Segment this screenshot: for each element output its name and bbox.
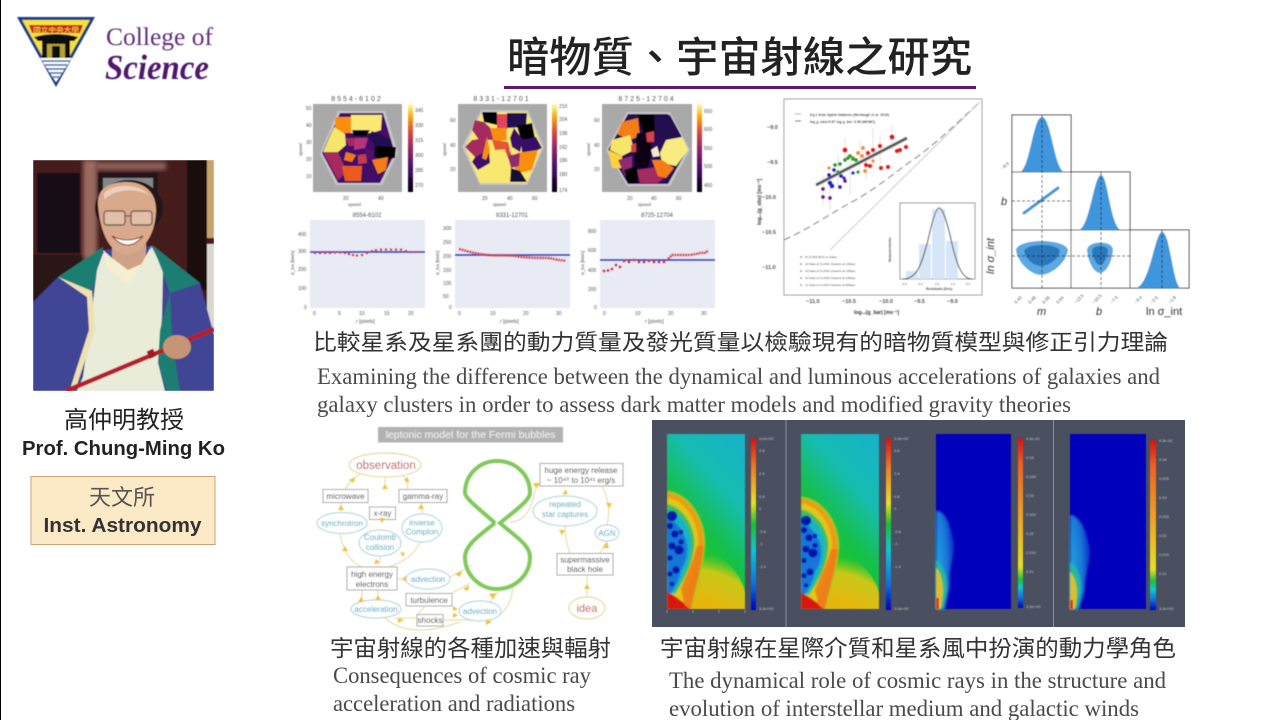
velocity dispersion map: 8725-12704: 8725-12704 <box>618 96 676 103</box>
velocity dispersion map: 8331-12701: 204 <box>559 117 568 123</box>
velocity dispersion map: 8331-12701: 198 <box>559 131 568 137</box>
English description: dark matter: Examining the difference between the dynamical and luminous accelerations of galaxies and <box>317 364 1160 390</box>
scatter plot: radial acceleration relation: Eq.1 from Spiral Galaxies (McGaugh et al. 2016) <box>810 113 889 117</box>
line plot: 8725-12704: 200 <box>588 287 597 293</box>
radiation process nodes <box>317 512 442 556</box>
velocity dispersion map: 8554-6102: 50 <box>306 106 312 112</box>
simulation: cosmic ray pressure run 1: 0.03 <box>1026 493 1035 498</box>
line plot: 8554-6102: 10 <box>359 311 365 317</box>
simulation: gas density run 2: 0 <box>894 506 897 511</box>
velocity dispersion map: 8725-12704: 20 <box>594 167 600 173</box>
output boxes: gamma-ray <box>403 492 443 501</box>
name: Chinese: 高仲明教授 <box>64 407 184 434</box>
line plot: 8725-12704: 800 <box>588 229 597 235</box>
simulation: gas density run 1 <box>647 434 774 667</box>
simulation: cosmic ray pressure run 2: 0.03 <box>1159 495 1168 500</box>
simulation: gas density run 1: 2.8 <box>759 448 765 453</box>
scatter plot: radial acceleration relation: −10.5 <box>842 299 856 305</box>
line plot: 8331-12701 <box>435 213 570 325</box>
electrons and transport nodes: advection <box>463 607 497 616</box>
velocity dispersion map: 8331-12701: 20 <box>482 196 488 202</box>
velocity dispersion map: 8725-12704 <box>586 96 713 207</box>
logo: College of Science wordmark: Science <box>105 48 209 87</box>
scatter plot: radial acceleration relation: −11.0 <box>806 299 820 305</box>
energy source nodes: AGN <box>598 529 616 538</box>
line plot: 8725-12704: 20 <box>668 311 674 317</box>
scatter plot: radial acceleration relation <box>757 99 982 316</box>
electrons and transport nodes: acceleration <box>354 605 398 614</box>
name: English: Prof. Chung-Ming Ko <box>22 438 225 460</box>
simulation: cosmic ray pressure run 2: 0.015 <box>1159 552 1170 557</box>
line plot: 8725-12704: r [pixels] <box>645 319 664 325</box>
line plot: 8554-6102: 0 <box>304 305 307 311</box>
velocity dispersion map: 8725-12704: 40 <box>594 143 600 149</box>
velocity dispersion map: 8331-12701: 40 <box>450 143 456 149</box>
corner plot: MCMC posteriors: ln σ_int <box>1146 306 1182 318</box>
scatter plot: radial acceleration relation: −9.0 <box>767 125 778 131</box>
corner plot: MCMC posteriors: −9.0 <box>1000 161 1010 171</box>
radiation process nodes: inverse <box>409 518 435 528</box>
velocity dispersion map: 8725-12704: 60 <box>676 196 682 202</box>
velocity dispersion map: 8554-6102 <box>298 96 424 207</box>
simulation: gas density run 2: 2.4 <box>894 471 900 476</box>
collar <box>58 247 103 293</box>
line plot: 8725-12704: 8725-12704 <box>641 213 674 219</box>
scatter plot: radial acceleration relation: 10 Data of CLASH Clusters at 100kpc <box>805 262 856 266</box>
velocity dispersion map: 8725-12704: 450 <box>704 183 713 189</box>
scatter plot: radial acceleration relation: M 13,000 BCG at 10kpc <box>805 255 838 259</box>
line plot: 8331-12701: 250 <box>443 240 452 246</box>
caption: cosmic ray dynamics <box>660 635 1176 720</box>
simulation: cosmic ray pressure run 1 <box>936 434 1041 609</box>
caption: cosmic ray dynamics: 宇宙射線在星際介質和星系風中扮演的動力學角色 <box>660 635 1176 661</box>
neck <box>112 240 146 270</box>
logo: College of Science wordmark <box>105 24 214 87</box>
inset histogram: residuals: 0.4 <box>966 282 971 286</box>
velocity dispersion map: 8554-6102: 300 <box>415 153 424 159</box>
velocity dispersion map: 8331-12701: 210 <box>559 104 568 110</box>
output boxes: x-ray <box>374 509 391 518</box>
line plot: 8554-6102: 400 <box>298 232 307 238</box>
line plot: 8554-6102: 20 <box>408 311 414 317</box>
simulation: cosmic ray pressure run 2: 0.04 <box>1159 457 1168 462</box>
corner plot: MCMC posteriors: 0.64 <box>1055 295 1065 305</box>
line plot: 8725-12704: 10 <box>635 311 641 317</box>
inset histogram: residuals: −0.4 <box>901 282 907 286</box>
simulation: gas density run 2: -1.4 <box>894 564 902 569</box>
energy source nodes: star captures <box>542 510 588 519</box>
line plot: 8331-12701: 300 <box>443 226 452 232</box>
corner plot: MCMC posteriors: m <box>1037 306 1046 318</box>
velocity dispersion map: 8554-6102: 345 <box>415 108 424 114</box>
velocity dispersion map: 8725-12704: 550 <box>704 146 713 152</box>
simulation: cosmic ray pressure run 1: 0.010 <box>1026 550 1037 555</box>
scatter plot: radial acceleration relation: −10.0 <box>762 195 776 201</box>
velocity dispersion map: 8331-12701: spaxel <box>493 202 506 207</box>
simulation: cosmic ray pressure run 2: 4.5e-02 <box>1159 438 1173 443</box>
velocity dispersion map: 8554-6102: 315 <box>415 138 424 144</box>
simulation: cosmic ray pressure run 2 <box>1070 434 1174 611</box>
simulation: gas density run 2 <box>781 434 909 664</box>
logo: university emblem: 國立中央大學 <box>33 25 80 34</box>
flow arrowheads <box>338 477 612 625</box>
simulation: cosmic ray pressure run 2: 0.035 <box>1159 476 1170 481</box>
simulation: gas density run 2: -0.8 <box>894 529 902 534</box>
velocity dispersion map: 8331-12701: 40 <box>507 196 513 202</box>
line plot: 8725-12704: 600 <box>588 248 597 254</box>
corner plot: MCMC posteriors: 0.56 <box>1041 295 1051 305</box>
velocity dispersion map: 8554-6102: 285 <box>415 168 424 174</box>
simulation: gas density run 1: -0.8 <box>759 529 767 534</box>
corner plot: MCMC posteriors: −3.4 <box>1133 295 1143 305</box>
velocity dispersion map: 8725-12704: spaxel <box>638 202 651 207</box>
velocity dispersion map: 8331-12701: 8331-12701 <box>473 96 531 103</box>
simulation: gas density run 1: 0 <box>759 506 762 511</box>
simulation: gas density run 1: 3.0e+00 <box>759 606 774 611</box>
caption: cosmic ray acceleration: 宇宙射線的各種加速與輻射 <box>330 635 611 661</box>
electrons and transport nodes: electrons <box>356 580 388 589</box>
simulation: gas density run 2: 2.8 <box>894 448 900 453</box>
corner plot: MCMC posteriors: b <box>1096 306 1102 318</box>
caption: cosmic ray acceleration <box>330 635 611 716</box>
scatter plot: radial acceleration relation: log₁₀(g_bar) [ms⁻²] <box>854 310 899 316</box>
energy source nodes <box>533 464 623 575</box>
velocity dispersion map: 8331-12701: 20 <box>450 167 456 173</box>
caption: cosmic ray acceleration: Consequences of cosmic ray <box>333 663 591 688</box>
simulation: cosmic ray pressure run 1: 3.0e+00 <box>1026 604 1041 609</box>
scatter plot: radial acceleration relation: −9.0 <box>947 299 958 305</box>
line plot: 8331-12701: 100 <box>443 281 452 287</box>
green figure-eight: Fermi bubbles <box>465 461 530 589</box>
velocity dispersion map: 8725-12704: 60 <box>594 118 600 124</box>
inset histogram: residuals: −0.2 <box>917 282 923 286</box>
English description: dark matter <box>317 364 1160 418</box>
simulation: gas density run 2: 3.0e+00 <box>894 606 909 611</box>
velocity dispersion map: 8331-12701: 174 <box>559 188 568 194</box>
idea node: idea <box>577 603 598 615</box>
scatter plot: radial acceleration relation: 10 Data of CLASH Clusters at 150kpc <box>805 269 856 273</box>
velocity dispersion map: 8725-12704: 650 <box>704 109 713 115</box>
line plot: 8331-12701: 30 <box>556 311 562 317</box>
affiliation box: 天文所 <box>89 485 155 510</box>
Chinese description: dark matter: 比較星系及星系團的動力質量及發光質量以檢驗現有的暗物質模型與修正引力理論 <box>313 330 1168 355</box>
observation node: observation <box>356 460 416 472</box>
simulation: gas density run 2: 3.0e+02 <box>894 436 909 441</box>
hair <box>94 180 163 226</box>
line plot: 8554-6102: 8554-6102 <box>353 213 382 219</box>
line plot: 8331-12701: 200 <box>443 254 452 260</box>
electrons and transport nodes: turbulence <box>410 596 448 605</box>
output boxes <box>323 490 447 520</box>
caption: cosmic ray acceleration: acceleration and radiations <box>333 691 575 716</box>
radiation process nodes: Coulomb <box>364 533 397 542</box>
line plot: 8554-6102: 200 <box>298 267 307 273</box>
connector lines <box>340 472 609 630</box>
corner plot: MCMC posteriors: b <box>1001 196 1007 208</box>
line plot: 8725-12704: 30 <box>701 311 707 317</box>
scatter plot: radial acceleration relation: 10 Data of CLASH Clusters at 200kpc <box>805 276 856 280</box>
electrons and transport nodes: advection <box>411 575 445 584</box>
velocity dispersion map: 8554-6102: 330 <box>415 123 424 129</box>
inset histogram: residuals: Residuals (Dex) <box>926 287 952 291</box>
energy source nodes: huge energy release <box>545 466 618 475</box>
logo: College of Science wordmark: College of <box>106 24 214 51</box>
simulation: gas density run 1: -1 <box>759 541 763 546</box>
simulation: gas density run 1: -1.4 <box>759 564 767 569</box>
velocity dispersion map: 8554-6102: spaxel <box>298 143 303 156</box>
velocity dispersion map: 8331-12701: 60 <box>450 118 456 124</box>
trim <box>58 277 95 388</box>
title: 暗物質、宇宙射線之研究 <box>507 34 972 81</box>
jacket <box>33 246 214 391</box>
line plot: 8331-12701: 0 <box>458 311 461 317</box>
English description: dark matter: galaxy clusters in order to assess dark matter models and modified gravity theories <box>317 392 1071 418</box>
radiation process nodes: Compton <box>406 528 438 536</box>
velocity dispersion map: 8554-6102: 40 <box>306 123 312 129</box>
affiliation box <box>31 476 215 544</box>
corner plot: MCMC posteriors: −10.5 <box>1091 293 1103 305</box>
simulation: cosmic ray pressure run 1: 0.03 <box>1026 455 1035 460</box>
simulation: cosmic ray pressure run 1: 0.030 <box>1026 474 1037 479</box>
line plot: 8725-12704 <box>580 213 715 325</box>
scatter plot: radial acceleration relation: −11.0 <box>762 265 776 271</box>
line plot: 8725-12704: σ_los [km/s] <box>580 251 585 275</box>
velocity dispersion map: 8725-12704: 500 <box>704 164 713 170</box>
logo: university emblem <box>17 17 95 87</box>
simulation: cosmic ray pressure run 1: 0.020 <box>1026 512 1037 517</box>
scatter plot: radial acceleration relation: −10.5 <box>762 230 776 236</box>
observation node <box>349 453 421 477</box>
simulation: cosmic ray pressure run 1: 0.02 <box>1026 531 1035 536</box>
velocity dispersion map: 8554-6102: 20 <box>343 196 349 202</box>
simulation: gas density run 1: 3.0e+02 <box>759 436 774 441</box>
corner plot: MCMC posteriors: −13.5 <box>1073 293 1085 305</box>
simulation: gas density run 1: 0.8 <box>759 494 765 499</box>
photo: Prof. Ko portrait <box>33 160 214 391</box>
scatter plot: radial acceleration relation: log₁₀(g_obs) [ms⁻²] <box>757 179 763 225</box>
simulation: cosmic ray pressure run 2: 0.02 <box>1159 533 1168 538</box>
velocity dispersion map: 8554-6102: 10 <box>306 174 312 180</box>
radiation process nodes: collision <box>366 543 394 552</box>
electrons and transport nodes <box>347 567 501 626</box>
simulation: cosmic ray pressure run 2: 0.01 <box>1159 571 1168 576</box>
affiliation box: Inst. Astronomy <box>44 515 202 537</box>
simulation: cosmic ray pressure run 2: 0.025 <box>1159 514 1170 519</box>
caption: cosmic ray dynamics: The dynamical role of cosmic rays in the structure and <box>669 668 1166 693</box>
velocity dispersion map: 8725-12704: spaxel <box>586 143 591 156</box>
face <box>98 182 156 254</box>
velocity dispersion map: 8331-12701: 180 <box>559 172 568 178</box>
energy source nodes: black hole <box>567 565 604 574</box>
line plot: 8331-12701: 150 <box>443 268 452 274</box>
inset histogram: residuals: 0.2 <box>951 282 956 286</box>
simulation: gas density run 2: 0.8 <box>894 494 900 499</box>
line plot: 8331-12701: 8331-12701 <box>496 213 529 219</box>
velocity dispersion map: 8725-12704: 600 <box>704 127 713 133</box>
line plot: 8331-12701: 0 <box>449 305 452 311</box>
line plot: 8554-6102: 15 <box>384 311 390 317</box>
inset histogram: residuals: Measurements <box>888 237 892 262</box>
velocity dispersion map: 8554-6102: spaxel <box>348 202 361 207</box>
corner plot: MCMC posteriors: −1.8 <box>1167 295 1177 305</box>
corner plot: MCMC posteriors: −7.5 <box>1109 295 1119 305</box>
line plot: 8554-6102: 0 <box>313 311 316 317</box>
velocity dispersion map: 8725-12704: 20 <box>627 196 633 202</box>
inset histogram: residuals <box>888 203 975 291</box>
stick <box>66 329 214 391</box>
radiation process nodes: synchrotron <box>321 519 363 528</box>
electrons and transport nodes: shocks <box>418 616 442 625</box>
output boxes: microwave <box>326 492 365 501</box>
simulation: cosmic ray pressure run 1: 4.0e-02 <box>1026 436 1040 441</box>
diagram title tag: leptonic model for the Fermi bubbles <box>386 429 555 441</box>
velocity dispersion map: 8331-12701: 60 <box>532 196 538 202</box>
velocity dispersion map: 8331-12701: 186 <box>559 158 568 164</box>
energy source nodes: supermassive <box>560 556 610 564</box>
line plot: 8554-6102: 100 <box>298 286 307 292</box>
velocity dispersion map: 8331-12701: spaxel <box>442 143 447 156</box>
velocity dispersion map: 8554-6102: 8554-6102 <box>331 96 383 103</box>
simulation: cosmic ray pressure run 2: 3.0e+00 <box>1159 606 1174 611</box>
diagram: leptonic model for the Fermi bubbles <box>317 427 623 630</box>
scatter plot: radial acceleration relation: 11 Data of CLASH Clusters at 600kpc <box>805 283 856 287</box>
line plot: 8331-12701: r [pixels] <box>500 319 519 325</box>
velocity dispersion map: 8725-12704: 40 <box>651 196 657 202</box>
inset histogram: residuals: 0.0 <box>935 282 940 286</box>
corner plot: MCMC posteriors: 0.40 <box>1013 295 1023 305</box>
line plot: 8554-6102: r [pixels] <box>356 319 375 325</box>
line plot: 8331-12701: σ_los [km/s] <box>435 251 440 275</box>
line plot: 8554-6102: 300 <box>298 249 307 255</box>
scatter plot: radial acceleration relation: log g_obs=0.57 log g_bar−3.90 (MCMC) <box>810 120 875 124</box>
corner plot: MCMC posteriors: 0.48 <box>1027 295 1037 305</box>
line plot: 8554-6102: σ_los [km/s] <box>290 251 295 275</box>
line plot: 8554-6102: 5 <box>338 311 341 317</box>
line plot: 8725-12704: 0 <box>603 311 606 317</box>
scatter plot: radial acceleration relation: −9.5 <box>767 160 778 166</box>
velocity dispersion map: 8554-6102: 20 <box>306 157 312 163</box>
corner plot: MCMC posteriors: −2.6 <box>1149 295 1159 305</box>
velocity dispersion map: 8554-6102: 40 <box>378 196 384 202</box>
velocity dispersion map: 8331-12701: 192 <box>559 145 568 151</box>
line plot: 8725-12704: 0 <box>594 305 597 311</box>
line plot: 8725-12704: 400 <box>588 268 597 274</box>
energy source nodes: ~ 10⁴⁰ to 10⁴¹ erg/s <box>547 476 615 485</box>
simulation: gas density run 1: 2.4 <box>759 471 765 476</box>
electrons and transport nodes: high energy <box>351 570 393 579</box>
velocity dispersion map: 8554-6102: 30 <box>306 140 312 146</box>
line plot: 8331-12701: 10 <box>490 311 496 317</box>
corner plot: MCMC posteriors <box>985 115 1189 318</box>
scatter plot: radial acceleration relation: −9.5 <box>914 299 925 305</box>
velocity dispersion map: 8331-12701 <box>442 96 568 207</box>
scatter plot: radial acceleration relation: −10.0 <box>879 299 893 305</box>
simulation panel background <box>652 420 1185 627</box>
shirt <box>77 247 165 391</box>
line plot: 8331-12701: 20 <box>523 311 529 317</box>
energy source nodes: repeated <box>549 500 581 509</box>
corner plot: MCMC posteriors: ln σ_int <box>985 237 997 274</box>
line plot: 8554-6102 <box>290 213 425 325</box>
line plot: 8331-12701: 50 <box>443 294 449 300</box>
idea node <box>569 597 605 619</box>
simulation: cosmic ray pressure run 1: 0.01 <box>1026 569 1035 574</box>
velocity dispersion map: 8554-6102: 270 <box>415 183 424 189</box>
simulation: gas density run 2: -1 <box>894 541 898 546</box>
